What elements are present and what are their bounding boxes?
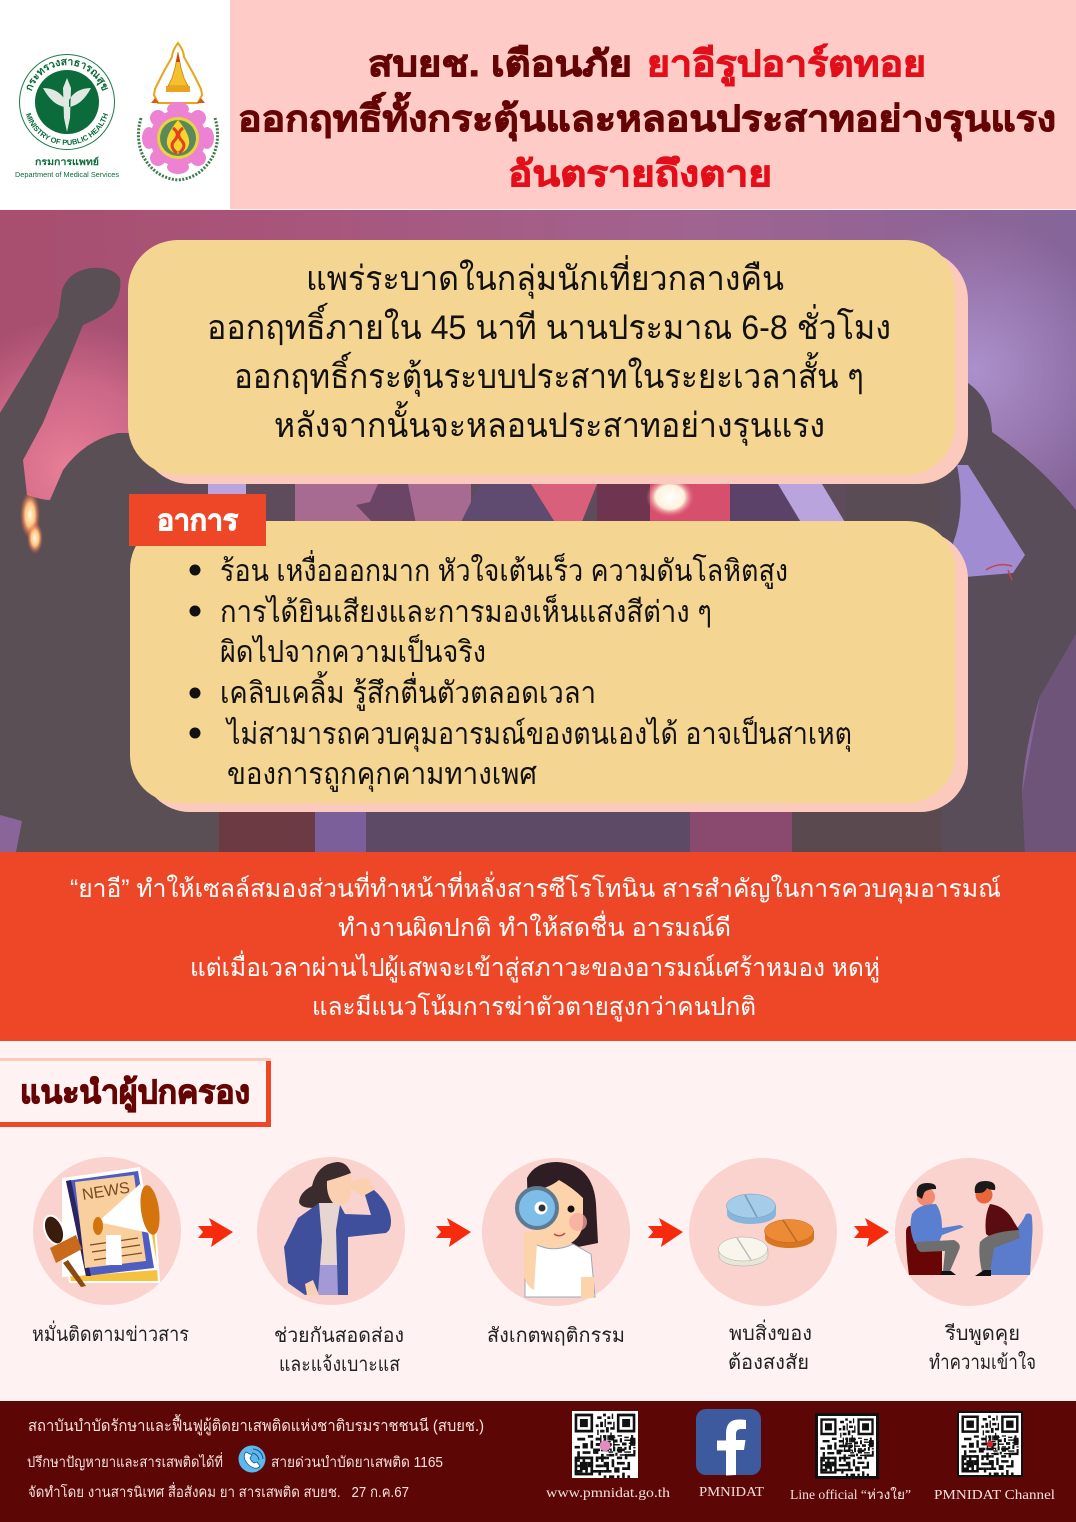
arrow (648, 1218, 683, 1247)
logo: Ministry of Public Health: กรมการแพทย์ (35, 156, 99, 168)
captions: ต้องสงสัย (728, 1352, 809, 1374)
QR labels: Line official “ห่วงใย” (790, 1486, 911, 1502)
QR code: YouTube channel (957, 1411, 1023, 1487)
logo: Ministry of Public Health (15, 54, 120, 179)
band: explanation: ทำงานผิดปกติ ทำให้สดชื่น อารมณ์ดี (338, 910, 731, 942)
panel: overview: ออกฤทธิ์ภายใน 45 นาที นานประมาณ 6-8 ชั่วโมง (207, 302, 891, 347)
arrow (198, 1218, 233, 1247)
QR code: Line official (815, 1413, 879, 1488)
captions: รีบพูดคุย (945, 1323, 1020, 1346)
footer contact text: สถาบันบำบัดรักษาและฟื้นฟูผู้ติดยาเสพติดแห่งชาติบรมราชชนนี (สบยช.) (28, 1414, 484, 1436)
icon: two people talking (906, 1181, 1032, 1276)
panel: overview: ออกฤทธิ์กระตุ้นระบบประสาทในระยะเวลาสั้น ๆ (234, 351, 864, 397)
captions: และแจ้งเบาะแส (279, 1354, 400, 1376)
silhouette: right dancer (940, 383, 1076, 852)
panel: overview (128, 240, 968, 484)
icon: girl with magnifier (517, 1162, 598, 1298)
band: explanation: “ยาอี” ทำให้เซลล์สมองส่วนที่ทำหน้าที่หลั่งสารซีโรโทนิน สารสำคัญในการควบคุมอารมณ์ (70, 871, 1001, 904)
title: ยาอีรูปอาร์ตทอย (647, 43, 926, 87)
panel: symptoms: ร้อน เหงื่อออกมาก หัวใจเต้นเร็ว ความดันโลหิตสูง (220, 550, 788, 589)
band: explanation (0, 852, 1076, 1041)
icon: Facebook (696, 1409, 761, 1476)
tag: symptoms heading (129, 494, 266, 546)
icon: phone (238, 1446, 266, 1472)
panel: symptoms: เคลิบเคลิ้ม รู้สึกตื่นตัวตลอดเวลา (220, 671, 596, 711)
icon: pills (718, 1194, 814, 1266)
QR labels: PMNIDAT (699, 1484, 765, 1499)
tag: advice for parents: แนะนำผู้ปกครอง (20, 1074, 250, 1113)
background photo: night-club crowd (0, 210, 1076, 852)
title: อันตรายถึงตาย (508, 153, 772, 194)
arrow (436, 1218, 471, 1247)
footer contact text: จัดทำโดย งานสารนิเทศ สื่อสังคม ยา สารเสพติด สบยช. 27 ก.ค.67 (28, 1482, 409, 1501)
icon: news tablet (40, 1167, 162, 1287)
panel: symptoms: ผิดไปจากความเป็นจริง (220, 633, 486, 669)
tag: advice for parents (0, 1058, 271, 1127)
logo: PMNIDAT institute (138, 43, 218, 180)
crowd band between the panels (128, 477, 968, 524)
title (238, 43, 1056, 194)
silhouette: left dancer (0, 268, 140, 852)
panel: symptoms: การได้ยินเสียงและการมองเห็นแสงสีต่าง ๆ (220, 593, 712, 629)
crowd strip under the panels (128, 810, 942, 852)
footer contact text (27, 1414, 484, 1501)
arrow (854, 1218, 889, 1247)
icon: woman looking out (284, 1162, 391, 1295)
captions: หมั่นติดตามข่าวสาร (32, 1320, 189, 1346)
title: ออกฤทธิ์ทั้งกระตุ้นและหลอนประสาทอย่างรุนแรง (238, 92, 1056, 142)
band: explanation: แต่เมื่อเวลาผ่านไปผู้เสพจะเข้าสู่สภาวะของอารมณ์เศร้าหมอง หดหู่ (190, 950, 880, 983)
step 3: observe behaviour (482, 1158, 630, 1306)
icon: news tablet: NEWS (81, 1180, 131, 1204)
captions (32, 1319, 1036, 1376)
title: สบยช. เตือนภัย (368, 43, 632, 84)
captions: ช่วยกันสอดส่อง (274, 1325, 404, 1347)
tag: symptoms heading: อาการ (157, 505, 238, 537)
captions: ทำความเข้าใจ (929, 1351, 1036, 1374)
footer contact text: สายด่วนบำบัดยาเสพติด 1165 (271, 1455, 443, 1471)
QR labels (546, 1484, 1055, 1502)
header banner (0, 0, 1076, 209)
QR code: website (572, 1411, 638, 1478)
band: explanation: และมีแนวโน้มการฆ่าตัวตายสูงกว่าคนปกติ (312, 992, 756, 1022)
captions: พบสิ่งของ (729, 1319, 812, 1345)
panel: overview: แพร่ระบาดในกลุ่มนักเที่ยวกลางคืน (306, 255, 784, 299)
step 2: watch and report (257, 1157, 405, 1305)
QR labels: www.pmnidat.go.th (546, 1485, 670, 1500)
QR labels: PMNIDAT Channel (934, 1487, 1055, 1502)
footer contact text: ปรึกษาปัญหายาและสารเสพติดได้ที่ (27, 1452, 223, 1471)
step 4: suspicious items (689, 1158, 837, 1306)
logo: Ministry of Public Health: Department of Medical Services (15, 172, 120, 179)
panel: overview: หลังจากนั้นจะหลอนประสาทอย่างรุนแรง (274, 401, 825, 446)
panel: symptoms: ของการถูกคุกคามทางเพศ (227, 758, 537, 793)
panel: symptoms (130, 521, 968, 812)
logo: Ministry of Public Health: กระทรวงสาธารณสุข (26, 58, 108, 91)
logo: Ministry of Public Health: MINISTRY OF PUBLIC HEALTH (26, 112, 108, 145)
panel: symptoms: ไม่สามารถควบคุมอารมณ์ของตนเองได้ อาจเป็นสาเหตุ (225, 715, 852, 753)
captions: สังเกตพฤติกรรม (487, 1325, 625, 1347)
step 5: talk and understand (895, 1158, 1043, 1306)
step 1: follow the news (33, 1157, 181, 1305)
footer (0, 1401, 1076, 1522)
